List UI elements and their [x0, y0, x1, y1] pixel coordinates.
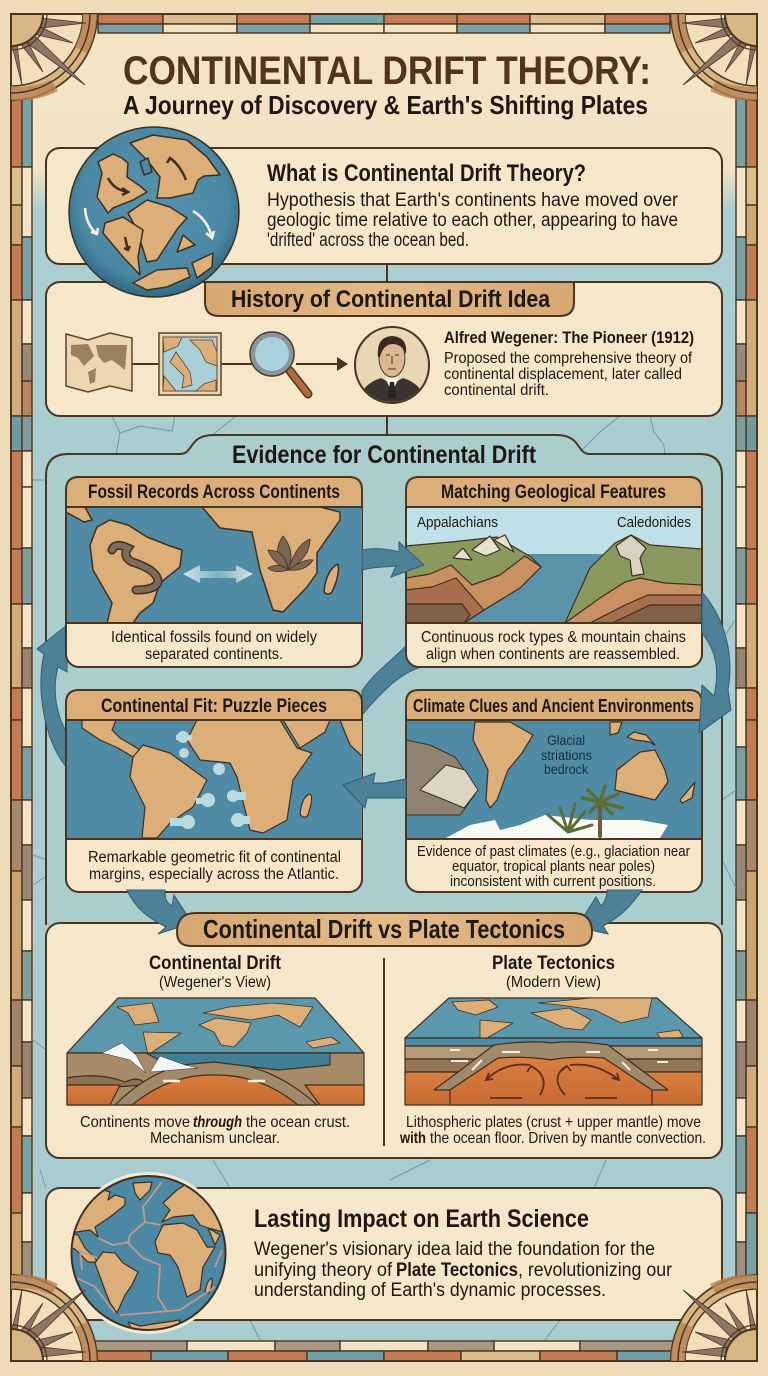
icon: drifting globe — [69, 127, 239, 297]
text: Alfred Wegener: Proposed the comprehensive theory of — [444, 350, 693, 367]
caption: climate: equator, tropical plants near poles) — [452, 858, 655, 875]
heading: evidence: Evidence for Continental Drift — [232, 441, 537, 469]
bottom band — [92, 1341, 676, 1361]
caption: fit: margins, especially across the Atlantic. — [89, 866, 339, 883]
compass corner: bottom left — [11, 1275, 97, 1361]
map: puzzle fit — [66, 720, 363, 839]
puzzle knobs — [170, 731, 250, 829]
label: Caledonides: Caledonides — [617, 515, 691, 531]
label: glacial striations: Glacial — [547, 733, 585, 748]
heading: lasting impact: Lasting Impact on Earth Science — [254, 1205, 589, 1233]
body: impact: , revolutionizing our — [518, 1260, 673, 1281]
arrow: climate to puzzle — [343, 773, 406, 808]
caption: drift: Continents move — [80, 1114, 190, 1131]
icon: framed map — [159, 333, 221, 395]
card: climate clues — [406, 690, 703, 892]
body: impact: Wegener's visionary idea laid the foundation for the — [254, 1239, 655, 1260]
map: south america and africa — [66, 507, 363, 623]
body: definition: 'drifted' across the ocean bed. — [267, 230, 469, 251]
caption: climate — [417, 843, 690, 890]
column: continental drift — [67, 953, 364, 1147]
text: Alfred Wegener: continental drift. — [444, 382, 549, 399]
diagram: wegener's view — [67, 998, 364, 1105]
body: impact: understanding of Earth's dynamic processes. — [254, 1280, 606, 1301]
arrow: puzzle to fossils — [37, 625, 67, 768]
body: impact: Plate Tectonics — [396, 1260, 518, 1281]
label: glacial striations — [541, 733, 592, 777]
tropical plants — [548, 786, 622, 836]
caption: geology: Continuous rock types & mountain chains — [421, 629, 686, 646]
subtitle: A Journey of Discovery & Earth's Shifting Plates — [123, 90, 648, 120]
caption: drift: Mechanism unclear. — [150, 1130, 280, 1147]
text: Alfred Wegener: continental displacement, later called — [444, 366, 682, 383]
divider — [383, 958, 385, 1146]
panel: what is continental drift — [46, 148, 722, 264]
compass corner: bottom right — [671, 1275, 757, 1361]
label: glacial striations: bedrock — [544, 762, 588, 777]
card: continental fit — [66, 690, 363, 892]
left band — [11, 97, 32, 1283]
diagram: matching mountains — [406, 507, 702, 624]
heading: fossil records: Fossil Records Across Continents — [88, 482, 340, 503]
title: CONTINENTAL DRIFT THEORY: — [123, 49, 651, 93]
caption: geology — [421, 629, 686, 663]
column: continental drift: Continental Drift — [149, 953, 282, 974]
fossil: reptile — [112, 545, 158, 590]
caption: drift — [80, 1114, 350, 1147]
map: ancient climates — [406, 720, 703, 839]
label: Appalachians: Appalachians — [417, 515, 498, 531]
diagram: modern view — [405, 998, 702, 1105]
portrait: Alfred Wegener — [355, 327, 429, 403]
arrow: climate to comparison — [577, 890, 642, 934]
arrow: puzzle to geology — [362, 646, 421, 715]
arrow head — [337, 357, 348, 371]
body: definition — [267, 190, 679, 251]
text: Alfred Wegener: Alfred Wegener: The Pioneer (1912) — [444, 328, 694, 347]
body: definition: Hypothesis that Earth's continents have moved over — [267, 190, 679, 211]
timeline connector — [132, 363, 340, 365]
right band — [736, 97, 757, 1283]
caption: fit — [88, 849, 341, 883]
arrow: geology to climate — [699, 592, 731, 733]
globe arrows — [85, 158, 214, 250]
icon: plate tectonics globe — [68, 1172, 230, 1335]
column: plate tectonics: Plate Tectonics — [492, 953, 615, 974]
heading: geological features: Matching Geological Features — [441, 482, 666, 503]
double arrow — [183, 565, 253, 583]
caption: drift: through — [193, 1114, 242, 1131]
plate motion arrows: drift — [163, 1080, 265, 1082]
convection arrows — [486, 1065, 619, 1098]
caption: fossils: separated continents. — [145, 646, 283, 663]
body: impact — [254, 1239, 673, 1301]
tab: history heading: History of Continental Drift Idea — [231, 286, 551, 313]
caption: climate: Evidence of past climates (e.g., glaciation near — [417, 843, 690, 860]
right block — [565, 535, 702, 623]
caption: fossils — [111, 629, 317, 663]
caption: geology: align when continents are reassembled. — [426, 646, 680, 663]
body: impact: unifying theory of — [254, 1260, 393, 1281]
caption: fossils: Identical fossils found on widely — [111, 629, 317, 646]
fossil: leaf — [268, 536, 313, 572]
icy continent — [446, 815, 668, 838]
compass corner: top right — [671, 14, 757, 100]
caption: tectonics: Lithospheric plates (crust + upper mantle) move — [406, 1114, 701, 1131]
caption: tectonics — [399, 1114, 706, 1147]
striated rock — [406, 740, 478, 815]
top band — [98, 14, 670, 33]
icon: magnifying glass — [250, 332, 308, 394]
seafloor cracks — [33, 300, 736, 1340]
label: glacial striations: striations — [541, 748, 592, 763]
icon: folded map — [66, 333, 132, 392]
body: definition: geologic time relative to each other, appearing to have — [267, 210, 678, 231]
caption: drift: the ocean crust. — [246, 1114, 350, 1131]
arrow: fossils to geology — [362, 542, 424, 577]
caption: fit: Remarkable geometric fit of continental — [88, 849, 341, 866]
right band teal foot — [746, 1213, 757, 1283]
arrow: puzzle to comparison — [127, 890, 192, 934]
heading: what is: What is Continental Drift Theory? — [267, 160, 586, 187]
left block — [406, 535, 541, 623]
heading: climate clues: Climate Clues and Ancient Environments — [413, 695, 694, 716]
card: fossil records — [66, 477, 363, 667]
column: plate tectonics — [399, 953, 706, 1147]
caption: climate: inconsistent with current positions. — [450, 873, 656, 890]
text: Alfred Wegener — [444, 328, 694, 399]
heading: continental fit: Continental Fit: Puzzle Pieces — [101, 696, 327, 717]
connector lines — [386, 264, 388, 435]
caption: tectonics: the ocean floor. Driven by mantle convection. — [430, 1130, 706, 1147]
compass corner: top left — [11, 14, 97, 100]
plate motion arrows — [450, 1050, 668, 1070]
panel: comparison — [46, 923, 722, 1158]
card: geological features — [406, 477, 702, 667]
plate boundaries — [77, 1182, 222, 1315]
panel: lasting impact — [46, 1188, 722, 1320]
caption: tectonics: with — [399, 1130, 426, 1147]
panel: history — [46, 282, 722, 416]
column: continental drift: (Wegener's View) — [159, 974, 271, 991]
tab: comparison heading: Continental Drift vs Plate Tectonics — [203, 914, 565, 944]
column: plate tectonics: (Modern View) — [506, 974, 601, 991]
